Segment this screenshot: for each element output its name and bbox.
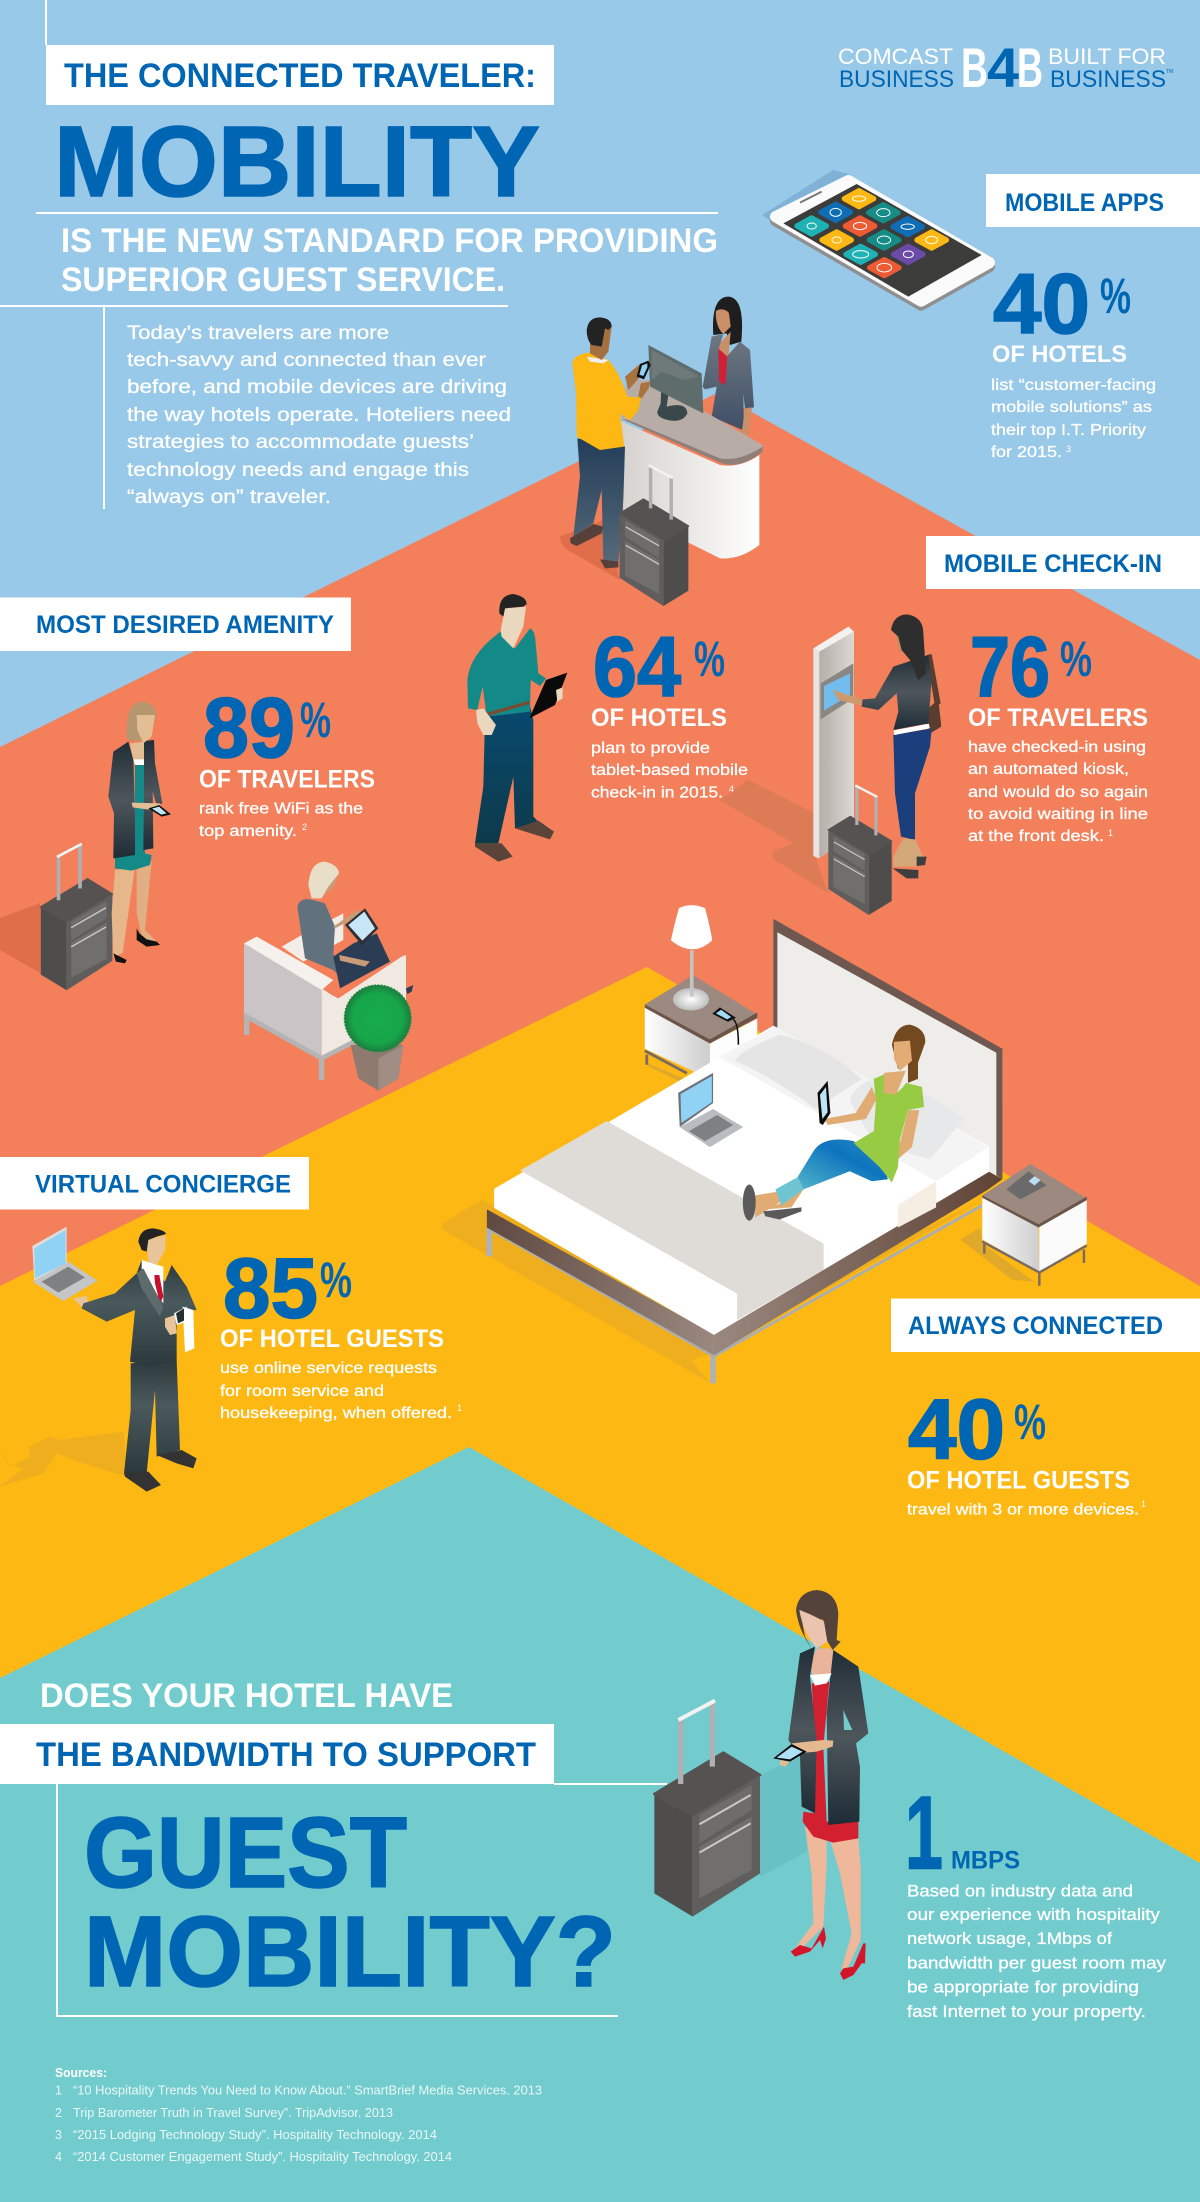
panel: most desired amenity — [0, 598, 375, 840]
illustration: hotel front desk scene — [560, 297, 763, 580]
subtitle: IS THE NEW STANDARD FOR PROVIDING — [61, 222, 718, 260]
intro paragraph — [127, 323, 511, 508]
stat: 64 percent: 64 — [593, 620, 681, 715]
stat label: OF HOTELS — [992, 341, 1127, 368]
stat description: rank free WiFi as the — [199, 800, 363, 818]
stat description — [591, 740, 748, 802]
illustration: woman using kiosk — [833, 614, 941, 878]
suitcase shadow — [0, 903, 40, 973]
stat description: use online service requests — [220, 1360, 437, 1377]
stat: 40 percent: 40 — [908, 1382, 1005, 1478]
background: teal floor — [0, 1447, 1200, 2202]
title box — [46, 45, 554, 105]
title box: THE CONNECTED TRAVELER: — [64, 57, 536, 95]
illustration: woman with red dress and suitcase — [654, 1590, 868, 1980]
stat: 1 Mbps: 1 — [905, 1776, 943, 1892]
logo: Comcast Business B4B: BUSINESS — [839, 66, 954, 93]
stat: 40 percent — [993, 257, 1131, 352]
stat description — [220, 1360, 462, 1422]
stat description: 1 — [1141, 1499, 1146, 1509]
stat: 85 percent: 85 — [223, 1242, 318, 1336]
stat description — [991, 377, 1156, 461]
receptionist — [703, 297, 754, 436]
stat label: OF HOTEL GUESTS — [220, 1325, 444, 1353]
label: mobile apps: MOBILE APPS — [1005, 189, 1164, 217]
intro paragraph: technology needs and engage this — [127, 460, 469, 481]
description: be appropriate for providing — [907, 1978, 1139, 1996]
description: Based on industry data and — [907, 1882, 1133, 1900]
subtitle — [61, 222, 718, 299]
stat description: travel with 3 or more devices. — [907, 1502, 1139, 1518]
reception desk — [618, 380, 763, 558]
label: virtual concierge: VIRTUAL CONCIERGE — [35, 1170, 291, 1198]
suitcase shadow — [760, 1753, 807, 1877]
label: most desired amenity: MOST DESIRED AMENITY — [36, 611, 334, 639]
sources list: “10 Hospitality Trends You Need to Know About.” SmartBrief Media Services. 2013 — [73, 2084, 542, 2098]
panel: virtual concierge — [0, 1157, 462, 1422]
laptop — [32, 1227, 97, 1301]
laptop on bed — [678, 1073, 743, 1147]
standing woman — [108, 702, 171, 963]
logo: Comcast Business B4B: B — [1017, 36, 1043, 99]
description: bandwidth per guest room may — [907, 1954, 1167, 1972]
panel: mobile check-in label — [926, 536, 1200, 589]
headboard — [773, 919, 1002, 1179]
floor shadow under guest — [560, 520, 620, 580]
illustration: armchair with tablet reader and plant — [244, 862, 413, 1091]
intro paragraph: the way hotels operate. Hoteliers need — [127, 405, 511, 426]
sources list — [55, 2065, 542, 2164]
big words — [84, 1797, 616, 2008]
sources list: 3 — [55, 2128, 62, 2142]
bed frame — [487, 1171, 1002, 1383]
sources list: Sources: — [55, 2065, 107, 2080]
stat description: an automated kiosk, — [968, 761, 1129, 778]
stat description: have checked-in using — [968, 739, 1146, 756]
stat description: 2 — [302, 822, 307, 832]
logo: Comcast Business B4B: BUILT FOR — [1048, 44, 1166, 69]
stat description — [199, 800, 363, 840]
suitcase at desk — [620, 465, 688, 606]
stat description: for room service and — [220, 1383, 384, 1400]
stat: 89 percent: % — [300, 692, 331, 748]
stat description: 1 — [457, 1403, 462, 1413]
intro paragraph: “always on” traveler. — [127, 487, 331, 508]
sources list: 1 — [55, 2084, 62, 2098]
stat: 85 percent: % — [320, 1252, 352, 1308]
description — [907, 1882, 1167, 2021]
description: network usage, 1Mbps of — [907, 1929, 1112, 1948]
stat: 89 percent: 89 — [203, 681, 295, 776]
sources list: “2014 Customer Engagement Study”. Hospitality Technology. 2014 — [73, 2150, 452, 2164]
big words: MOBILITY? — [84, 1896, 616, 2008]
stat: 1 Mbps: MBPS — [951, 1846, 1020, 1874]
stat label: OF TRAVELERS — [199, 766, 375, 794]
stat description: 1 — [1108, 828, 1113, 838]
illustration: concierge with laptop — [0, 1227, 197, 1492]
heading line: DOES YOUR HOTEL HAVE — [40, 1677, 453, 1715]
stat label: OF TRAVELERS — [968, 704, 1148, 732]
big words: GUEST — [84, 1797, 407, 1909]
armchair back and person — [282, 862, 413, 994]
logo: Comcast Business B4B: BUSINESS — [1050, 66, 1166, 93]
stat label: OF HOTEL GUESTS — [907, 1466, 1130, 1494]
label: most desired amenity — [0, 598, 351, 651]
logo: Comcast Business B4B: 4 — [987, 36, 1019, 99]
stat description: to avoid waiting in line — [968, 806, 1148, 823]
white heading box: THE BANDWIDTH TO SUPPORT — [36, 1736, 536, 1774]
logo: Comcast Business B4B: COMCAST — [838, 44, 953, 69]
stat description: for 2015. — [991, 444, 1062, 461]
label: always connected: ALWAYS CONNECTED — [908, 1312, 1163, 1340]
label: virtual concierge — [0, 1157, 309, 1210]
stat description: housekeeping, when offered. — [220, 1405, 452, 1422]
woman on bed with tablet — [743, 1025, 925, 1221]
stat: 40 percent: % — [1014, 1394, 1046, 1450]
label: always connected — [891, 1298, 1200, 1352]
stat: 1 Mbps — [905, 1776, 1020, 1892]
stat description: plan to provide — [591, 740, 710, 757]
potted plant — [344, 985, 411, 1091]
mattress and bedding — [495, 1027, 988, 1334]
left nightstand with lamp and phone — [645, 905, 757, 1081]
decorative title rule lines — [0, 0, 718, 2016]
armchair body — [244, 937, 406, 1080]
panel: mobile apps — [986, 174, 1200, 461]
intro paragraph: tech-savvy and connected than ever — [127, 350, 487, 371]
stat description: and would do so again — [968, 784, 1148, 801]
panel: always connected — [891, 1298, 1200, 1518]
woman — [773, 1590, 868, 1980]
closing heading — [0, 1677, 616, 2008]
illustration: hotel bed scene — [442, 905, 1087, 1383]
stat description: mobile solutions” as — [991, 399, 1152, 416]
panel: tablet check-in stat — [591, 620, 748, 802]
background: yellow floor — [0, 967, 1200, 2202]
panel: 1 Mbps — [905, 1776, 1167, 2021]
suitcase — [41, 844, 112, 990]
subtitle: SUPERIOR GUEST SERVICE. — [61, 261, 505, 299]
stat description: at the front desk. — [968, 828, 1104, 845]
stat: 40 percent: % — [1100, 268, 1131, 324]
stat label: OF HOTELS — [591, 704, 727, 732]
sources list: “2015 Lodging Technology Study”. Hospitality Technology. 2014 — [73, 2128, 437, 2142]
stat description: check-in in 2015. — [591, 784, 723, 802]
stat description — [968, 739, 1148, 845]
white heading box — [0, 1724, 554, 1784]
stat description: their top I.T. Priority — [991, 422, 1146, 439]
illustration: check-in kiosk — [720, 627, 854, 893]
illustration: man with tablet — [467, 594, 567, 862]
illustration: smartphone with app icons — [764, 171, 989, 305]
shadow — [0, 1432, 127, 1487]
stat: 40 percent: 40 — [993, 257, 1090, 352]
stat description: tablet-based mobile — [591, 762, 748, 779]
stat description: 3 — [1066, 444, 1071, 454]
guest in yellow sweater — [570, 317, 651, 568]
illustration: woman with phone and suitcase — [0, 702, 171, 990]
intro paragraph: Today’s travelers are more — [127, 323, 389, 344]
stat: 76 percent: 76 — [970, 620, 1050, 715]
description: our experience with hospitality — [907, 1905, 1161, 1924]
stat description: top amenity. — [199, 823, 297, 840]
suited man — [73, 1228, 197, 1492]
intro paragraph: strategies to accommodate guests’ — [127, 432, 474, 453]
panel: mobile check-in label: MOBILE CHECK-IN — [944, 550, 1162, 578]
bed shadow — [442, 1199, 984, 1383]
large suitcase — [654, 1701, 760, 1917]
stat description: list “customer-facing — [991, 377, 1156, 394]
title word: mobility: MOBILITY — [54, 106, 540, 218]
sources list: Trip Barometer Truth in Travel Survey”. TripAdvisor. 2013 — [73, 2106, 393, 2120]
logo: Comcast Business B4B: B — [961, 36, 988, 99]
suitcase at kiosk — [828, 785, 892, 915]
logo: Comcast Business B4B: TM — [1166, 69, 1173, 75]
stat: 76 percent: % — [1060, 631, 1092, 687]
description: fast Internet to your property. — [907, 2002, 1146, 2021]
sources list: 4 — [55, 2150, 62, 2164]
stat description: 4 — [729, 784, 734, 794]
label: mobile apps — [986, 174, 1200, 227]
panel: kiosk check-in stat — [968, 620, 1148, 845]
stat: 64 percent: % — [694, 631, 725, 687]
monitor — [648, 345, 703, 421]
sources list: 2 — [55, 2106, 62, 2120]
stat: 40 percent — [908, 1382, 1046, 1478]
right nightstand with desk phone — [960, 1164, 1087, 1286]
intro paragraph: before, and mobile devices are driving — [127, 377, 507, 398]
logo: Comcast Business B4B — [838, 36, 1173, 99]
